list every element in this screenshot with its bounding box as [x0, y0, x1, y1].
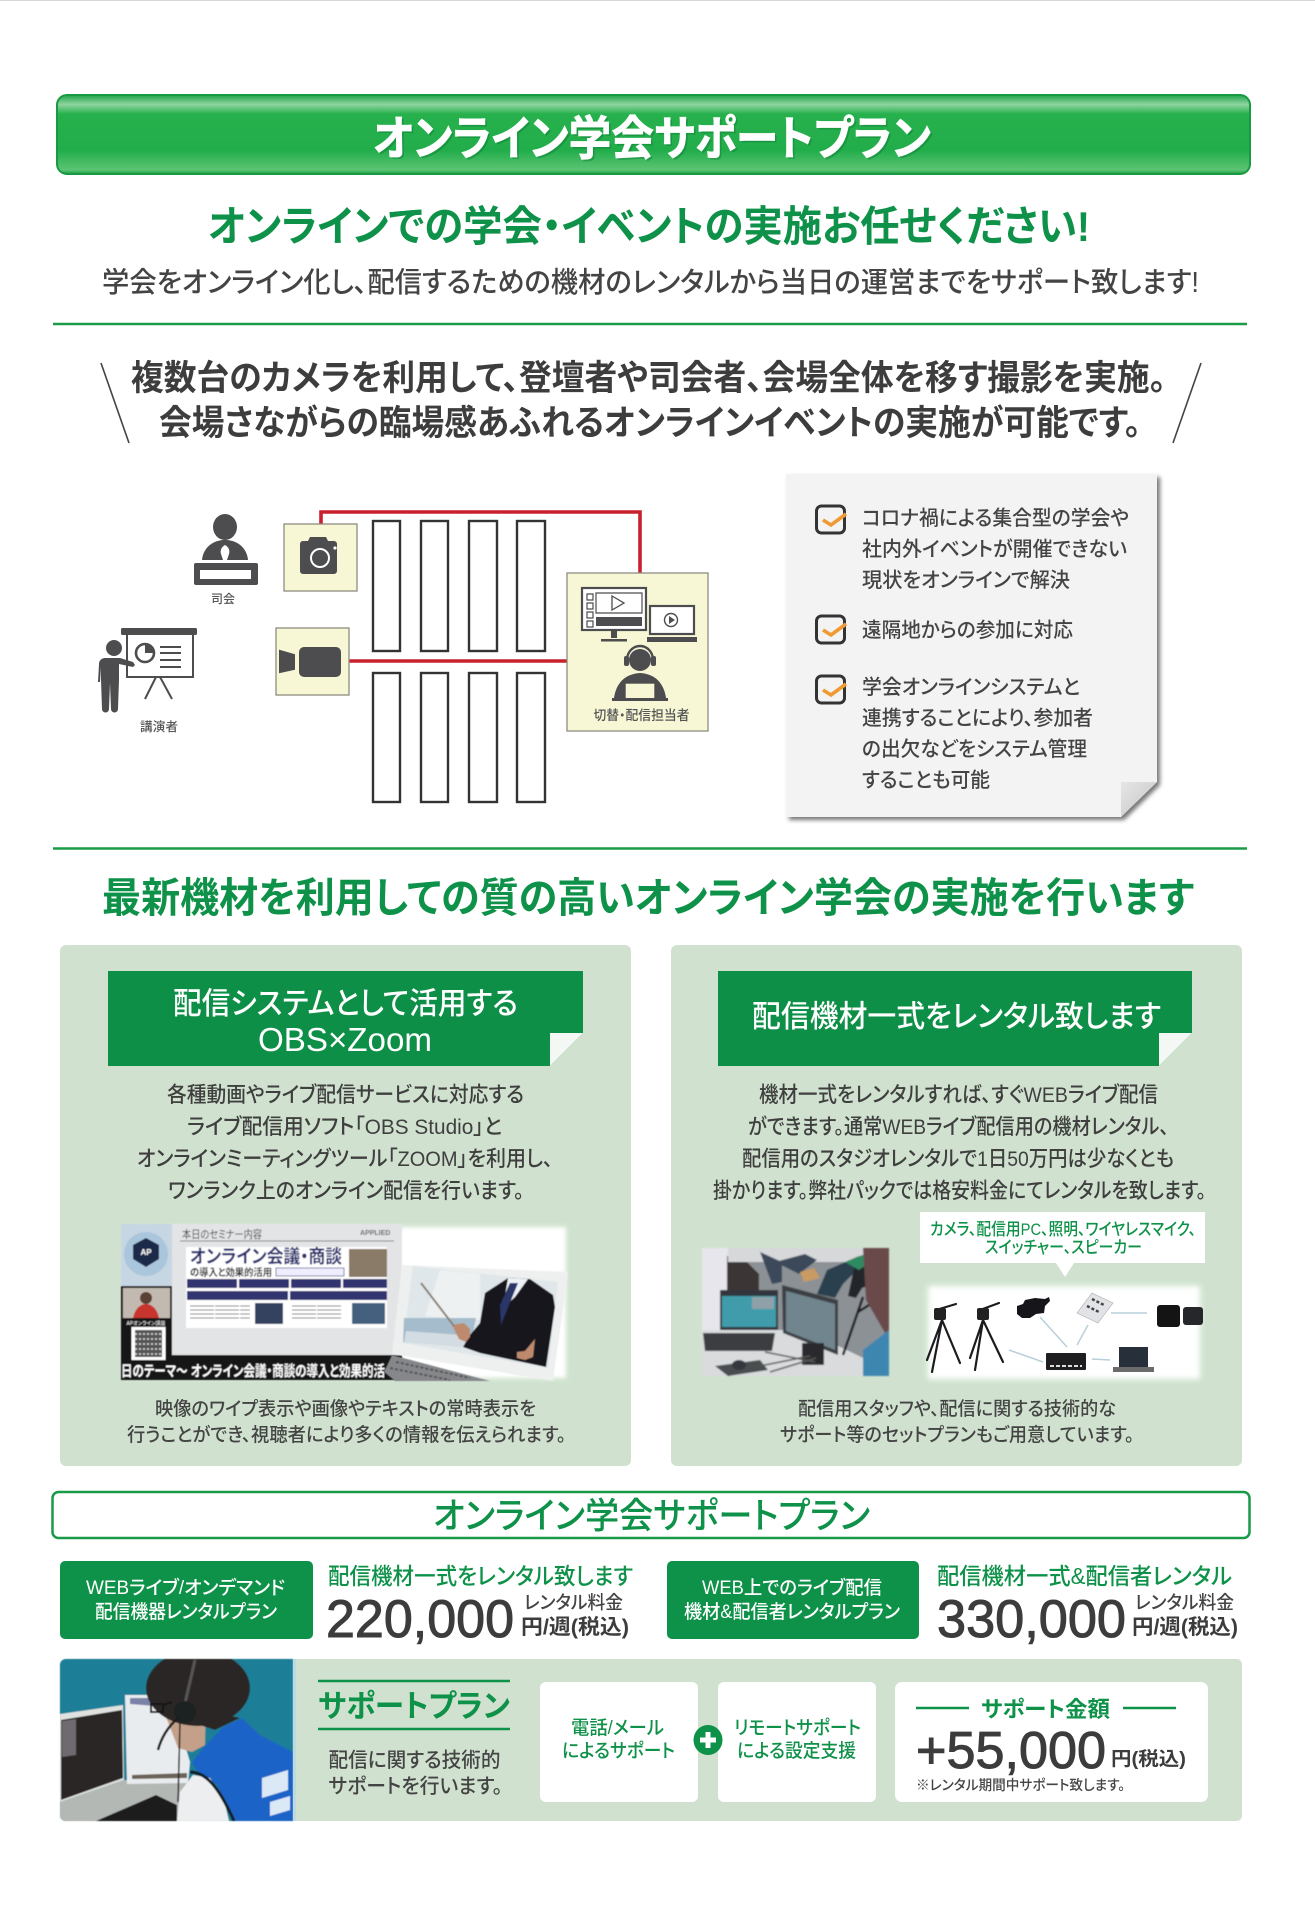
card: support price: ※レンタル期間中サポート致します。 — [916, 1777, 1125, 1793]
card: remote support: による設定支援 — [737, 1740, 856, 1762]
switcher — [1046, 1353, 1086, 1370]
screenshot: broadcast screen: 日のテーマ〜 オンライン会議・商談の導入と効果的活 — [121, 1362, 385, 1380]
plan heading: オンライン学会サポートプラン — [433, 1495, 870, 1536]
photo: streaming desk — [702, 1248, 908, 1376]
icon: camera — [284, 524, 357, 591]
plan tag: 機材&配信者レンタルプラン — [684, 1601, 900, 1623]
venue diagram — [98, 512, 708, 802]
body text — [713, 1082, 1206, 1203]
subheading: オンラインでの学会・イベントの実施お任せください! — [208, 203, 1090, 250]
plan: equipment rental: 配信機材一式をレンタル致します — [328, 1563, 633, 1589]
audio mixer — [1077, 1293, 1113, 1323]
panel: OBS x Zoom — [60, 945, 631, 1466]
screenshot: broadcast screen: APPLIED — [360, 1230, 390, 1237]
card: remote support: リモートサポート — [734, 1717, 861, 1739]
price: 220,000 — [326, 1590, 514, 1649]
speech bubble: equipment list: カメラ、配信用PC、照明、ワイヤレスマイク、 — [930, 1220, 1196, 1239]
intro text: 学会をオンライン化し、配信するための機材のレンタルから当日の運営までをサポート致します! — [102, 267, 1199, 299]
icon: lecturer with screen — [98, 628, 197, 734]
statement: multi camera: 複数台のカメラを利用して、登壇者や司会者、会場全体を移す撮影を実施。 — [131, 359, 1166, 398]
caption: 行うことができ、視聴者により多くの情報を伝えられます。 — [127, 1424, 566, 1446]
body text: ワンランク上のオンライン配信を行います。 — [168, 1179, 524, 1203]
body text: ができます。通常WEBライブ配信用の機材レンタル、 — [748, 1114, 1169, 1139]
photo: lecturer on laptop — [384, 1265, 568, 1381]
body text: ライブ配信用ソフト「OBS Studio」と — [187, 1114, 502, 1139]
caption: 配信用スタッフや、配信に関する技術的な — [798, 1398, 1116, 1420]
title banner — [57, 95, 1250, 174]
switching operator booth — [567, 573, 708, 731]
card: phone and mail — [540, 1682, 698, 1802]
body text: オンラインミーティングツール「ZOOM」を利用し、 — [137, 1147, 553, 1171]
section heading: 最新機材を利用しての質の高いオンライン学会の実施を行います — [102, 875, 1194, 921]
card: remote support — [718, 1682, 876, 1802]
screenshot: broadcast screen: AP — [140, 1248, 152, 1257]
icon: moderator: 司会 — [211, 592, 235, 606]
card: phone and mail: によるサポート — [562, 1740, 675, 1762]
support description: サポートを行います。 — [328, 1775, 502, 1798]
plan tag: WEBライブ/オンデマンド — [86, 1576, 285, 1599]
speech bubble: equipment list — [920, 1212, 1205, 1277]
laptop — [1119, 1347, 1148, 1367]
checklist text: 遠隔地からの参加に対応 — [862, 619, 1073, 642]
checkbox 2 — [816, 616, 846, 643]
plan: equipment rental: 円/週(税込) — [521, 1616, 629, 1639]
plan tag — [60, 1561, 313, 1639]
screenshot: broadcast screen: 本日のセミナー内容 — [182, 1227, 262, 1241]
panel label: OBS×Zoom — [258, 1021, 432, 1058]
connection lines — [1009, 1313, 1147, 1362]
checklist text: 社内外イベントが開催できない — [862, 538, 1127, 561]
panel label: 配信機材一式をレンタル致します — [752, 1000, 1161, 1034]
plan tag: 配信機器レンタルプラン — [95, 1601, 277, 1623]
plan: equipment and operator rental: 円/週(税込) — [1132, 1616, 1238, 1639]
photo: support staff — [60, 1650, 295, 1821]
card: phone and mail: 電話/メール — [571, 1717, 664, 1739]
panel: equipment rental — [671, 945, 1242, 1466]
body text: 掛かります。弊社パックでは格安料金にてレンタルを致します。 — [713, 1179, 1206, 1203]
caption — [127, 1398, 566, 1446]
plan: equipment rental — [60, 1561, 633, 1649]
panel label: 配信システムとして活用する — [173, 987, 518, 1021]
support plan title: サポートプラン — [318, 1689, 510, 1724]
checkbox 1 — [816, 506, 846, 533]
screenshot: broadcast screen: APオンライン講座 — [127, 1320, 165, 1327]
checkbox 3 — [816, 676, 846, 703]
checklist text: することも可能 — [862, 769, 990, 792]
support description: 配信に関する技術的 — [328, 1749, 500, 1772]
title banner: オンライン学会サポートプラン — [373, 112, 931, 165]
screenshot: broadcast screen — [121, 1224, 402, 1380]
video camera — [1017, 1297, 1050, 1318]
card: support price — [895, 1682, 1208, 1802]
statement: multi camera — [101, 359, 1201, 443]
equipment white panel — [927, 1286, 1203, 1379]
price: 330,000 — [937, 1590, 1126, 1649]
caption — [780, 1398, 1134, 1446]
plan heading — [52, 1492, 1250, 1538]
body text: 機材一式をレンタルすれば、すぐWEBライブ配信 — [759, 1082, 1158, 1107]
icon: lecturer with screen: 講演者 — [140, 719, 178, 734]
panel label — [718, 971, 1192, 1066]
caption: サポート等のセットプランもご用意しています。 — [780, 1424, 1134, 1446]
red cables — [321, 512, 640, 661]
icon: video camera — [276, 628, 349, 695]
card: support price: サポート金額 — [981, 1697, 1110, 1722]
checklist text: 学会オンラインシステムと — [862, 676, 1080, 699]
plan: equipment and operator rental: レンタル料金 — [1135, 1592, 1234, 1613]
speech bubble: equipment list: スイッチャー、スピーカー — [985, 1238, 1142, 1257]
plan tag — [667, 1561, 919, 1639]
support description — [328, 1749, 502, 1798]
checklist text: コロナ禍による集合型の学会や — [862, 507, 1129, 530]
card: support price: +55,000 — [916, 1722, 1106, 1780]
screenshot and photo — [121, 1224, 568, 1381]
body text: 配信用のスタジオレンタルで1日50万円は少なくとも — [742, 1147, 1174, 1171]
support plan band — [60, 1650, 1242, 1821]
plan: equipment and operator rental — [667, 1561, 1238, 1649]
plan tag: WEB上でのライブ配信 — [702, 1576, 882, 1599]
seats — [373, 521, 545, 802]
plan: equipment rental: レンタル料金 — [524, 1592, 623, 1613]
screenshot: broadcast screen: の導入と効果的活用 — [190, 1266, 272, 1279]
body text — [137, 1082, 553, 1203]
statement: multi camera: 会場さながらの臨場感あふれるオンラインイベントの実施が可能です。 — [159, 404, 1141, 443]
plan: equipment and operator rental: 配信機材一式&配信者レンタル — [937, 1563, 1232, 1589]
icon: plus — [694, 1725, 722, 1755]
caption: 映像のワイプ表示や画像やテキストの常時表示を — [155, 1398, 536, 1420]
panel label — [108, 971, 583, 1066]
switching operator booth: 切替・配信担当者 — [594, 707, 690, 723]
checklist text — [862, 507, 1129, 792]
tripods — [927, 1303, 1003, 1372]
icon: moderator — [194, 514, 258, 606]
card: support price: 円(税込) — [1111, 1748, 1186, 1770]
note card: benefits checklist — [786, 474, 1160, 820]
wireless mic — [1157, 1305, 1180, 1327]
body text: 各種動画やライブ配信サービスに対応する — [167, 1082, 524, 1107]
checklist text: の出欠などをシステム管理 — [862, 738, 1087, 761]
checklist text: 連携することにより、参加者 — [862, 707, 1093, 730]
checklist text: 現状をオンラインで解決 — [862, 569, 1070, 592]
title banner: オンライン学会サポートプラン — [375, 114, 933, 167]
screenshot: broadcast screen: オンライン会議・商談 — [190, 1246, 342, 1267]
